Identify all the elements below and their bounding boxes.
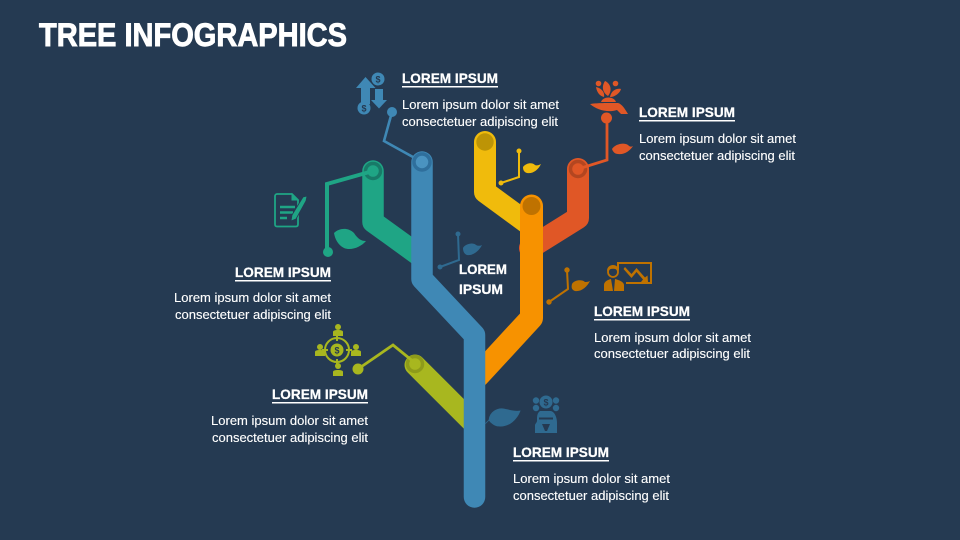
icon: money arrows: $ (361, 104, 367, 114)
text block: center label (459, 261, 507, 297)
leaf: trunk (485, 409, 520, 426)
text block: lower left: Lorem ipsum dolor sit amet (211, 414, 369, 428)
text block: left (174, 264, 332, 322)
text block: right: Lorem ipsum dolor sit amet (594, 331, 752, 345)
icon: person with falling chart (604, 262, 652, 291)
icon: head with money: $ (543, 398, 549, 408)
text block: lower left (211, 386, 369, 445)
icon: money network: $ (334, 346, 340, 356)
text block: top right: LOREM IPSUM (639, 104, 735, 120)
icon: hand with plant (590, 81, 628, 114)
flag: yellow leaf (500, 150, 541, 184)
flag: orange leaf (547, 268, 590, 304)
text block: left: LOREM IPSUM (235, 264, 331, 280)
flag: blue leaf (438, 232, 482, 268)
icon: money network (315, 324, 361, 376)
text block: center label: LOREM (459, 261, 507, 277)
text block: bottom: consectetuer adipiscing elit (513, 489, 670, 503)
branch: orange (478, 197, 540, 376)
text block: lower left: LOREM IPSUM (272, 386, 368, 402)
text block: right: LOREM IPSUM (594, 303, 690, 319)
text block: lower left: consectetuer adipiscing elit (212, 431, 369, 445)
icon: money arrows: $ (375, 74, 381, 84)
text block: top: LOREM IPSUM (402, 70, 498, 86)
title: TREE INFOGRAPHICS (39, 17, 347, 53)
text block: left: Lorem ipsum dolor sit amet (174, 291, 332, 305)
text block: top: Lorem ipsum dolor sit amet (402, 98, 560, 112)
branch: red (530, 112, 633, 248)
text block: left: consectetuer adipiscing elit (175, 308, 332, 322)
branch: blue upper connector (384, 107, 422, 162)
icon: money arrows (356, 72, 387, 114)
text block: top (402, 70, 560, 129)
icon: head with money (533, 396, 559, 433)
text block: top right (639, 104, 797, 163)
branch: green (323, 164, 420, 257)
text block: bottom (513, 444, 671, 503)
text block: center label: IPSUM (459, 281, 503, 297)
text block: bottom: Lorem ipsum dolor sit amet (513, 472, 671, 486)
text block: right (594, 303, 752, 361)
text block: top: consectetuer adipiscing elit (402, 115, 559, 129)
branch: yellow (476, 133, 530, 225)
text block: bottom: LOREM IPSUM (513, 444, 609, 460)
text block: top right: Lorem ipsum dolor sit amet (639, 132, 797, 146)
text block: top right: consectetuer adipiscing elit (639, 149, 796, 163)
branch: lime (352, 345, 472, 422)
icon: document and pen (275, 194, 307, 226)
trunk: blue (414, 154, 474, 497)
text block: right: consectetuer adipiscing elit (594, 347, 751, 361)
